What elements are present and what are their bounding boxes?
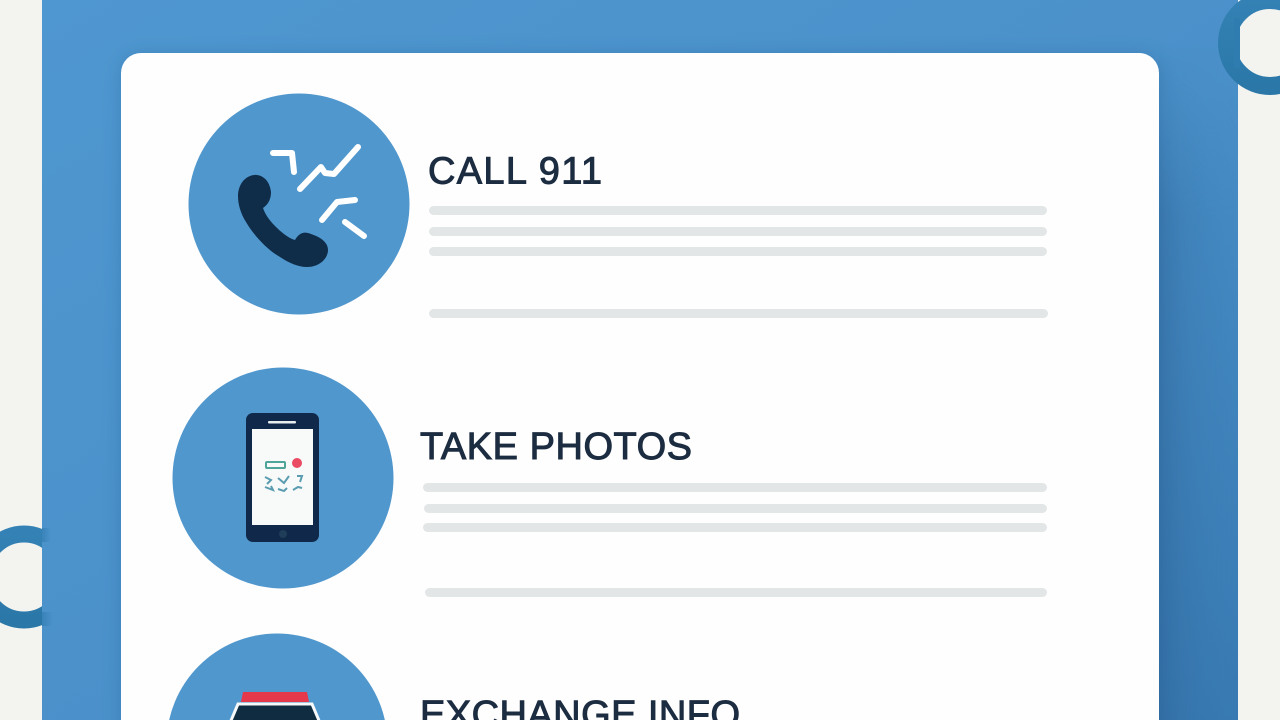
heading: call 911: CALL 911 xyxy=(428,150,602,192)
step 3: exchange info xyxy=(166,634,740,720)
icon: phone call xyxy=(188,94,410,314)
ring: left overlap on panel xyxy=(42,528,53,626)
text placeholder lines xyxy=(429,206,1048,318)
heading: take photos: TAKE PHOTOS xyxy=(420,426,692,468)
card shadow xyxy=(121,54,1159,720)
photo scene marks xyxy=(265,462,302,491)
icon: id card xyxy=(166,634,388,720)
ring: top right xyxy=(1227,0,1280,86)
handset xyxy=(238,175,328,267)
icon: smartphone xyxy=(172,368,394,588)
step 2: take photos xyxy=(172,368,1047,597)
panel: white card xyxy=(121,53,1159,720)
signal marks xyxy=(273,147,364,236)
ring: left xyxy=(0,534,66,620)
text placeholder lines xyxy=(423,483,1047,597)
step 1: call 911 xyxy=(188,94,1048,318)
right band shading xyxy=(1159,108,1202,720)
